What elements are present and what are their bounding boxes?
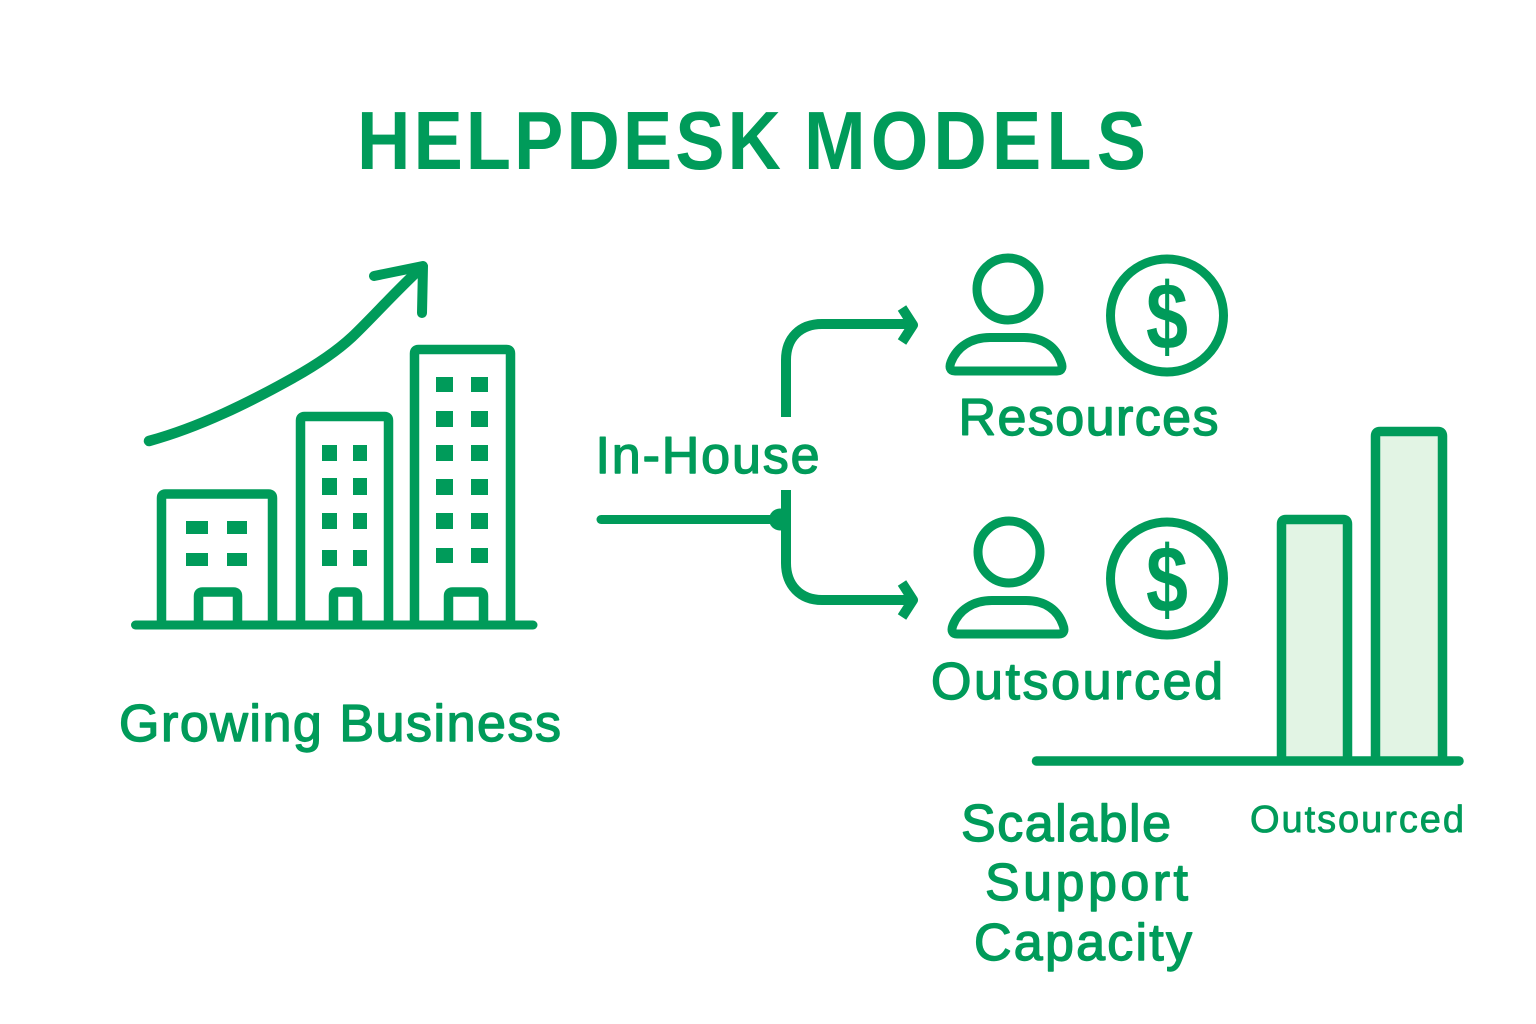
label: Scalable Support Capacity — [961, 795, 1192, 972]
title — [357, 94, 1146, 187]
label: In-House: In-House — [596, 427, 820, 485]
bar: lower — [1282, 520, 1348, 761]
building: small — [162, 494, 272, 625]
arrow: split connector — [601, 308, 913, 617]
bar: higher — [1376, 432, 1442, 761]
icon: resources dollar: $ — [1146, 264, 1188, 369]
title: MODELS — [804, 94, 1146, 187]
label: Resources: Resources — [958, 389, 1218, 447]
bar chart: scalable capacity — [1036, 432, 1459, 761]
label: Scalable Support Capacity: Capacity — [974, 914, 1192, 972]
icon: resources person — [950, 258, 1062, 371]
label: Growing Business: Growing Business — [119, 695, 561, 753]
building: medium — [300, 416, 388, 625]
label: Scalable Support Capacity: Support — [985, 854, 1189, 912]
building: tall — [414, 350, 510, 625]
icon: outsourced person — [952, 521, 1064, 634]
arrow: growth trend — [149, 266, 423, 441]
label: Scalable Support Capacity: Scalable — [961, 795, 1171, 853]
label: Outsourced: Outsourced — [931, 653, 1223, 711]
label: Outsourced axis: Outsourced — [1250, 799, 1464, 841]
icon: resources dollar — [1110, 259, 1224, 372]
title: HELPDESK — [357, 94, 781, 187]
icon: outsourced dollar — [1110, 522, 1224, 635]
icon: growing buildings with arrow — [136, 266, 533, 625]
icon: outsourced dollar: $ — [1146, 527, 1188, 632]
